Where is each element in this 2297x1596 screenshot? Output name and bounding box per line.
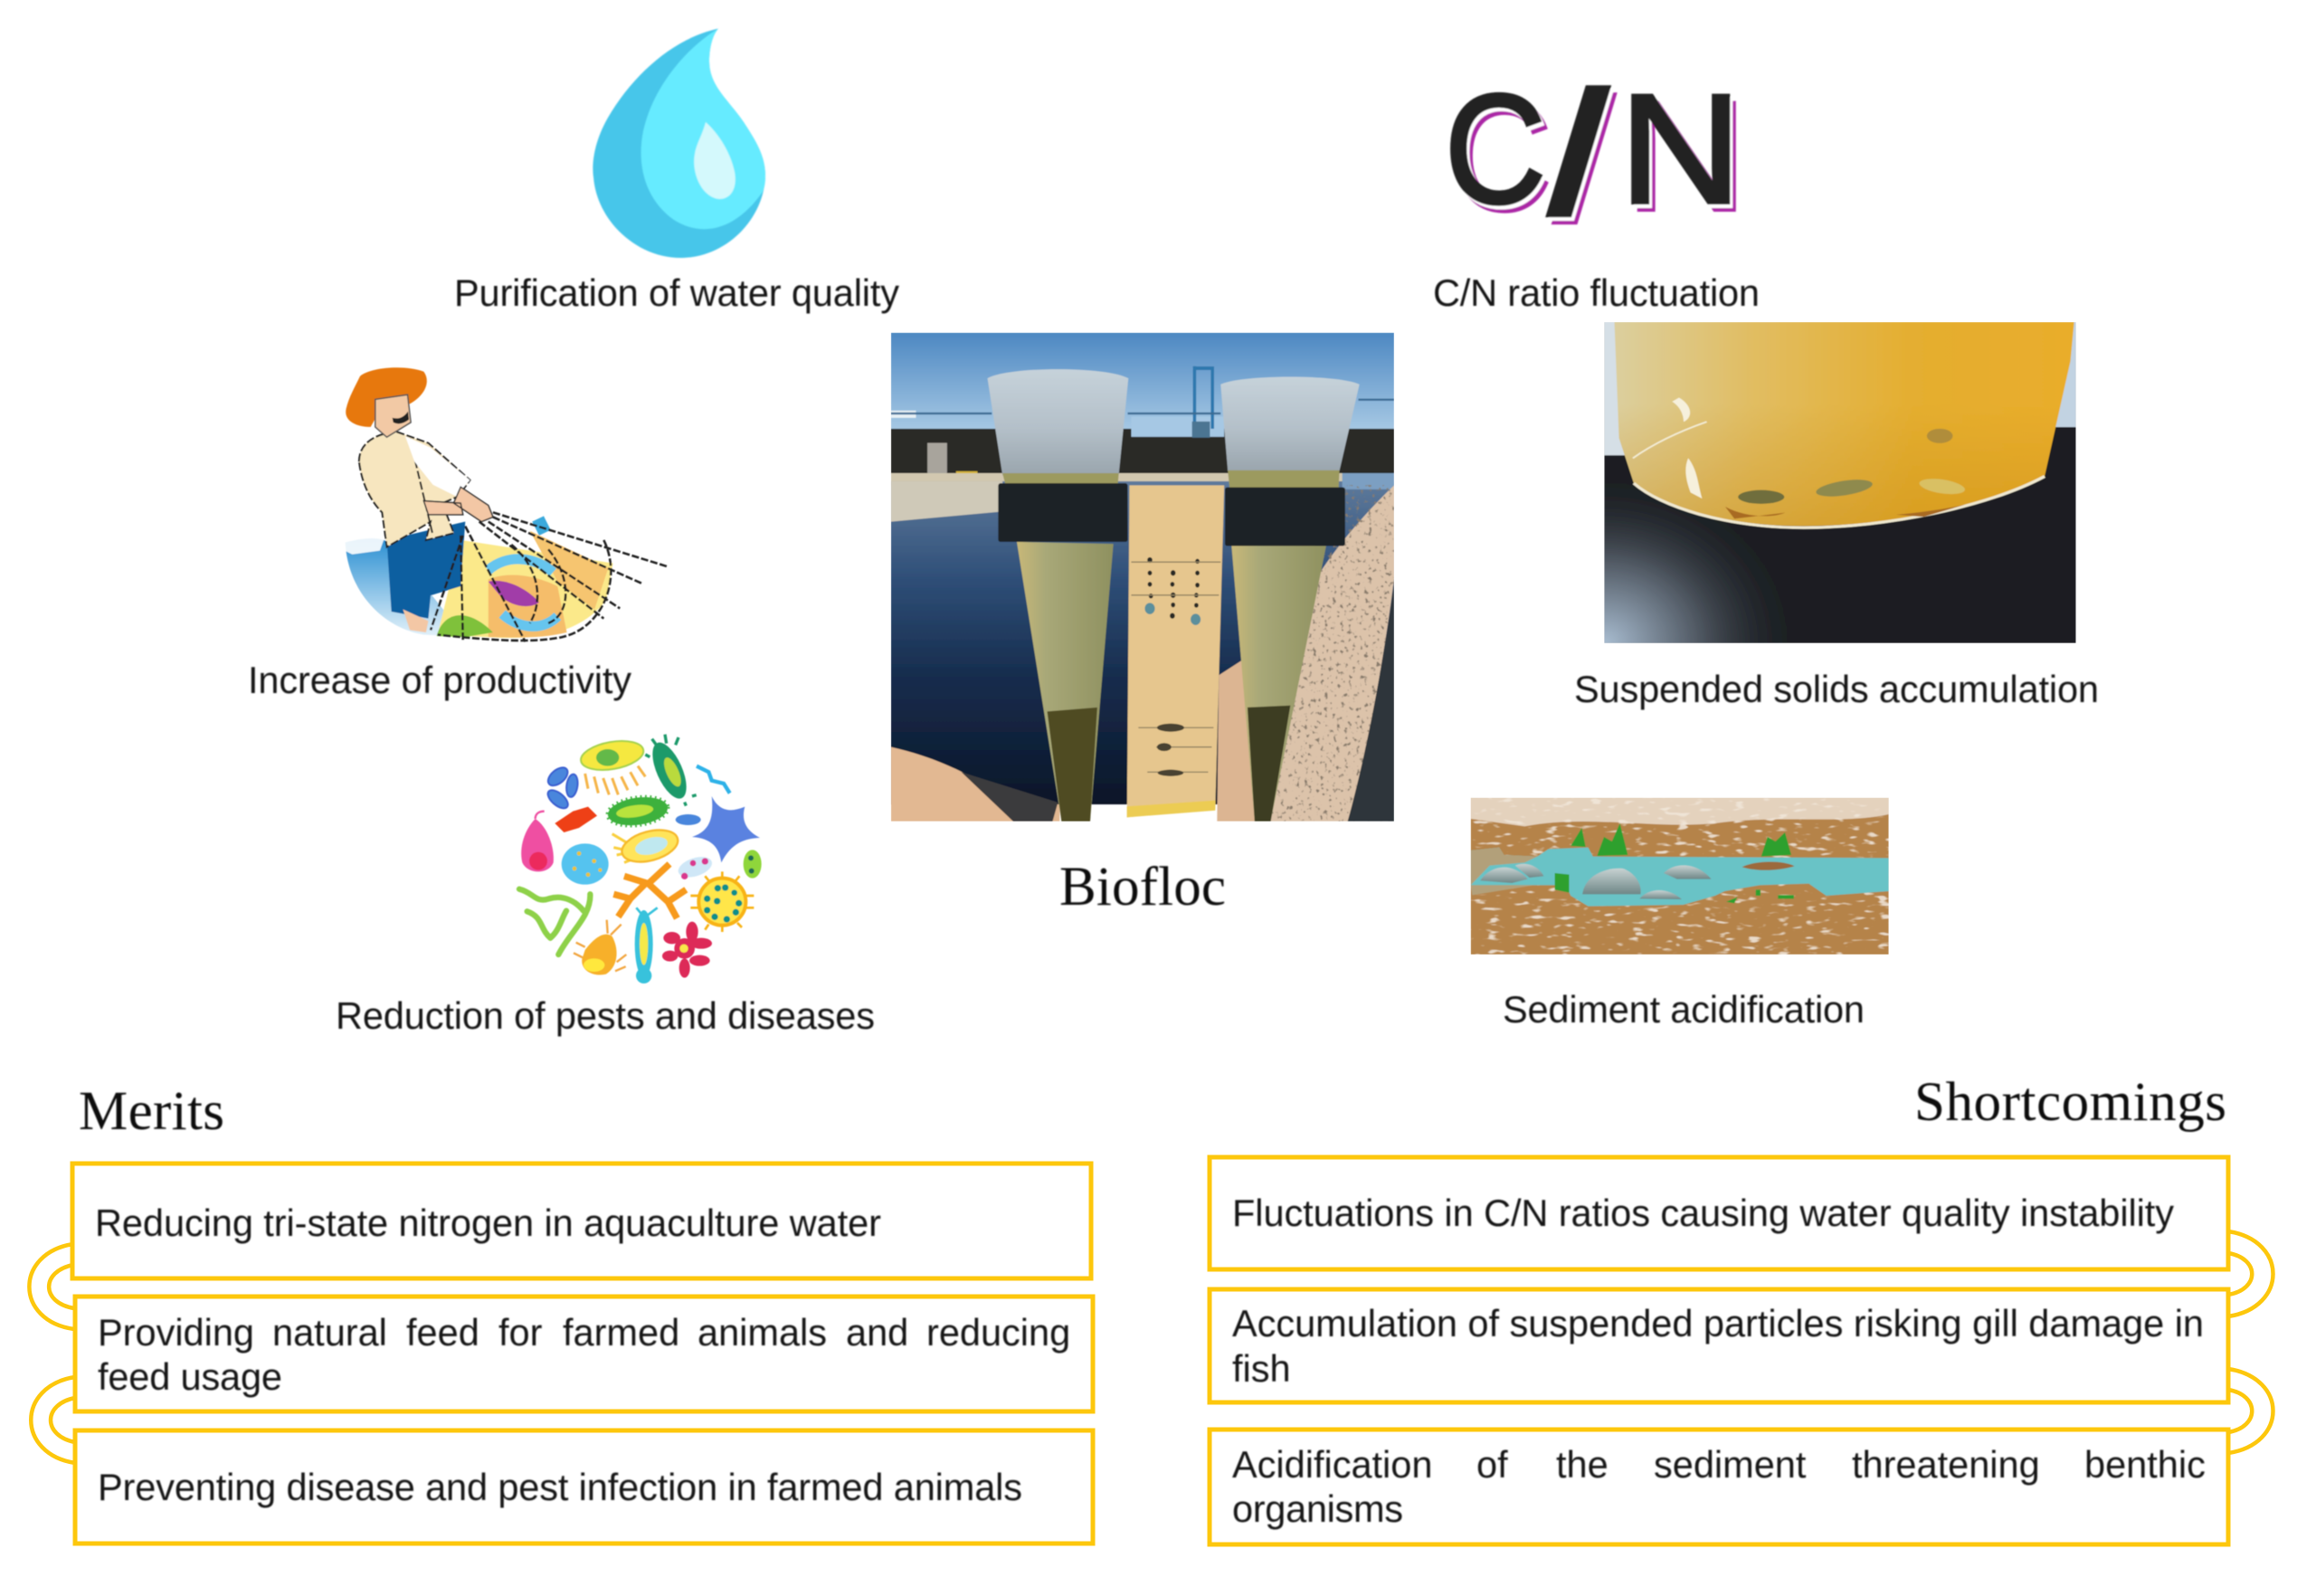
- heading: Shortcomings: Shortcomings: [1914, 1072, 2226, 1133]
- connector arcs between merit boxes 1 and 2: [29, 1244, 74, 1329]
- shortcoming box 3: organisms: [1232, 1487, 1403, 1530]
- icon: C/N logo: C: [1445, 62, 1546, 236]
- icon: C/N logo: /: [1558, 68, 1611, 254]
- panel: merits: [29, 1081, 1093, 1544]
- merit box 2: animals: [698, 1311, 827, 1354]
- connector arcs between shortcoming boxes 2 and 3: [2228, 1369, 2273, 1453]
- merit box 3: Preventing disease and pest infection in farmed animals: [98, 1466, 1022, 1508]
- label: C/N ratio fluctuation: C/N ratio fluctuation: [1433, 271, 1760, 314]
- merit box 3: [75, 1430, 1093, 1544]
- merit box 2: feed usage: [98, 1355, 282, 1398]
- merit box 2: natural: [272, 1311, 387, 1354]
- shortcoming box 3: benthic: [2084, 1443, 2206, 1486]
- shortcoming box 3: threatening: [1852, 1443, 2040, 1486]
- shortcoming box 3: sediment: [1654, 1443, 1807, 1486]
- connector arcs between shortcoming boxes 1 and 2: [2228, 1231, 2273, 1316]
- label: reduction of pests and diseases: Reduction of pests and diseases: [336, 994, 875, 1037]
- illustration: pests and microbes cluster: [519, 735, 762, 983]
- merit box 2: reducing: [926, 1311, 1070, 1354]
- label: suspended solids accumulation: Suspended solids accumulation: [1574, 668, 2099, 710]
- merit box 2: for: [498, 1311, 543, 1354]
- heading: Merits: Merits: [79, 1081, 224, 1142]
- merit box 1: [72, 1164, 1091, 1278]
- photo: suspended solids in beaker: [1604, 322, 2076, 643]
- shortcoming box 3: the: [1556, 1443, 1609, 1486]
- merit box 2: farmed: [563, 1311, 679, 1354]
- connector arcs between merit boxes 2 and 3: [31, 1377, 75, 1463]
- merit box 2: Providing: [98, 1311, 254, 1354]
- icon: C/N logo: N: [1619, 62, 1742, 236]
- icon: C/N logo: C: [1451, 69, 1552, 243]
- shortcoming box 2: fish: [1232, 1347, 1291, 1390]
- icon: C/N logo: N: [1622, 66, 1744, 240]
- merit box 1: Reducing tri-state nitrogen in aquaculture water: [95, 1202, 881, 1244]
- label: purification of water quality: Purification of water quality: [454, 271, 899, 314]
- icon: C/N logo: /: [1552, 61, 1605, 247]
- photo: biofloc settling cones at pond: [891, 333, 1394, 822]
- label: increase of productivity: Increase of productivity: [248, 659, 631, 701]
- shortcoming box 1: Fluctuations in C/N ratios causing water quality instability: [1232, 1192, 2174, 1234]
- heading: Biofloc: Biofloc: [1059, 857, 1226, 917]
- illustration: fisherman casting net: [343, 367, 669, 641]
- merit box 2: and: [846, 1311, 908, 1354]
- shortcoming box 2: Accumulation of suspended particles risking gill damage in: [1232, 1302, 2204, 1344]
- shortcoming box 2: [1210, 1289, 2228, 1402]
- shortcoming box 3: Acidification: [1232, 1443, 1432, 1486]
- label: sediment acidification: Sediment acidification: [1503, 988, 1865, 1031]
- icon: water drop: [593, 29, 765, 258]
- shortcoming box 3: of: [1476, 1443, 1508, 1486]
- panel: shortcomings: [1210, 1072, 2273, 1544]
- merit box 2: feed: [406, 1311, 479, 1354]
- shortcoming box 1: [1210, 1157, 2228, 1269]
- icon: C/N logo: /: [1555, 64, 1608, 251]
- merit box 2: [75, 1297, 1093, 1411]
- shortcoming box 3: [1210, 1430, 2228, 1544]
- icon: C/N logo: N: [1625, 70, 1748, 243]
- illustration: sediment acidification: [1471, 798, 1889, 955]
- icon: C/N logo: C: [1447, 65, 1549, 240]
- icon: C/N logo: [1445, 61, 1748, 254]
